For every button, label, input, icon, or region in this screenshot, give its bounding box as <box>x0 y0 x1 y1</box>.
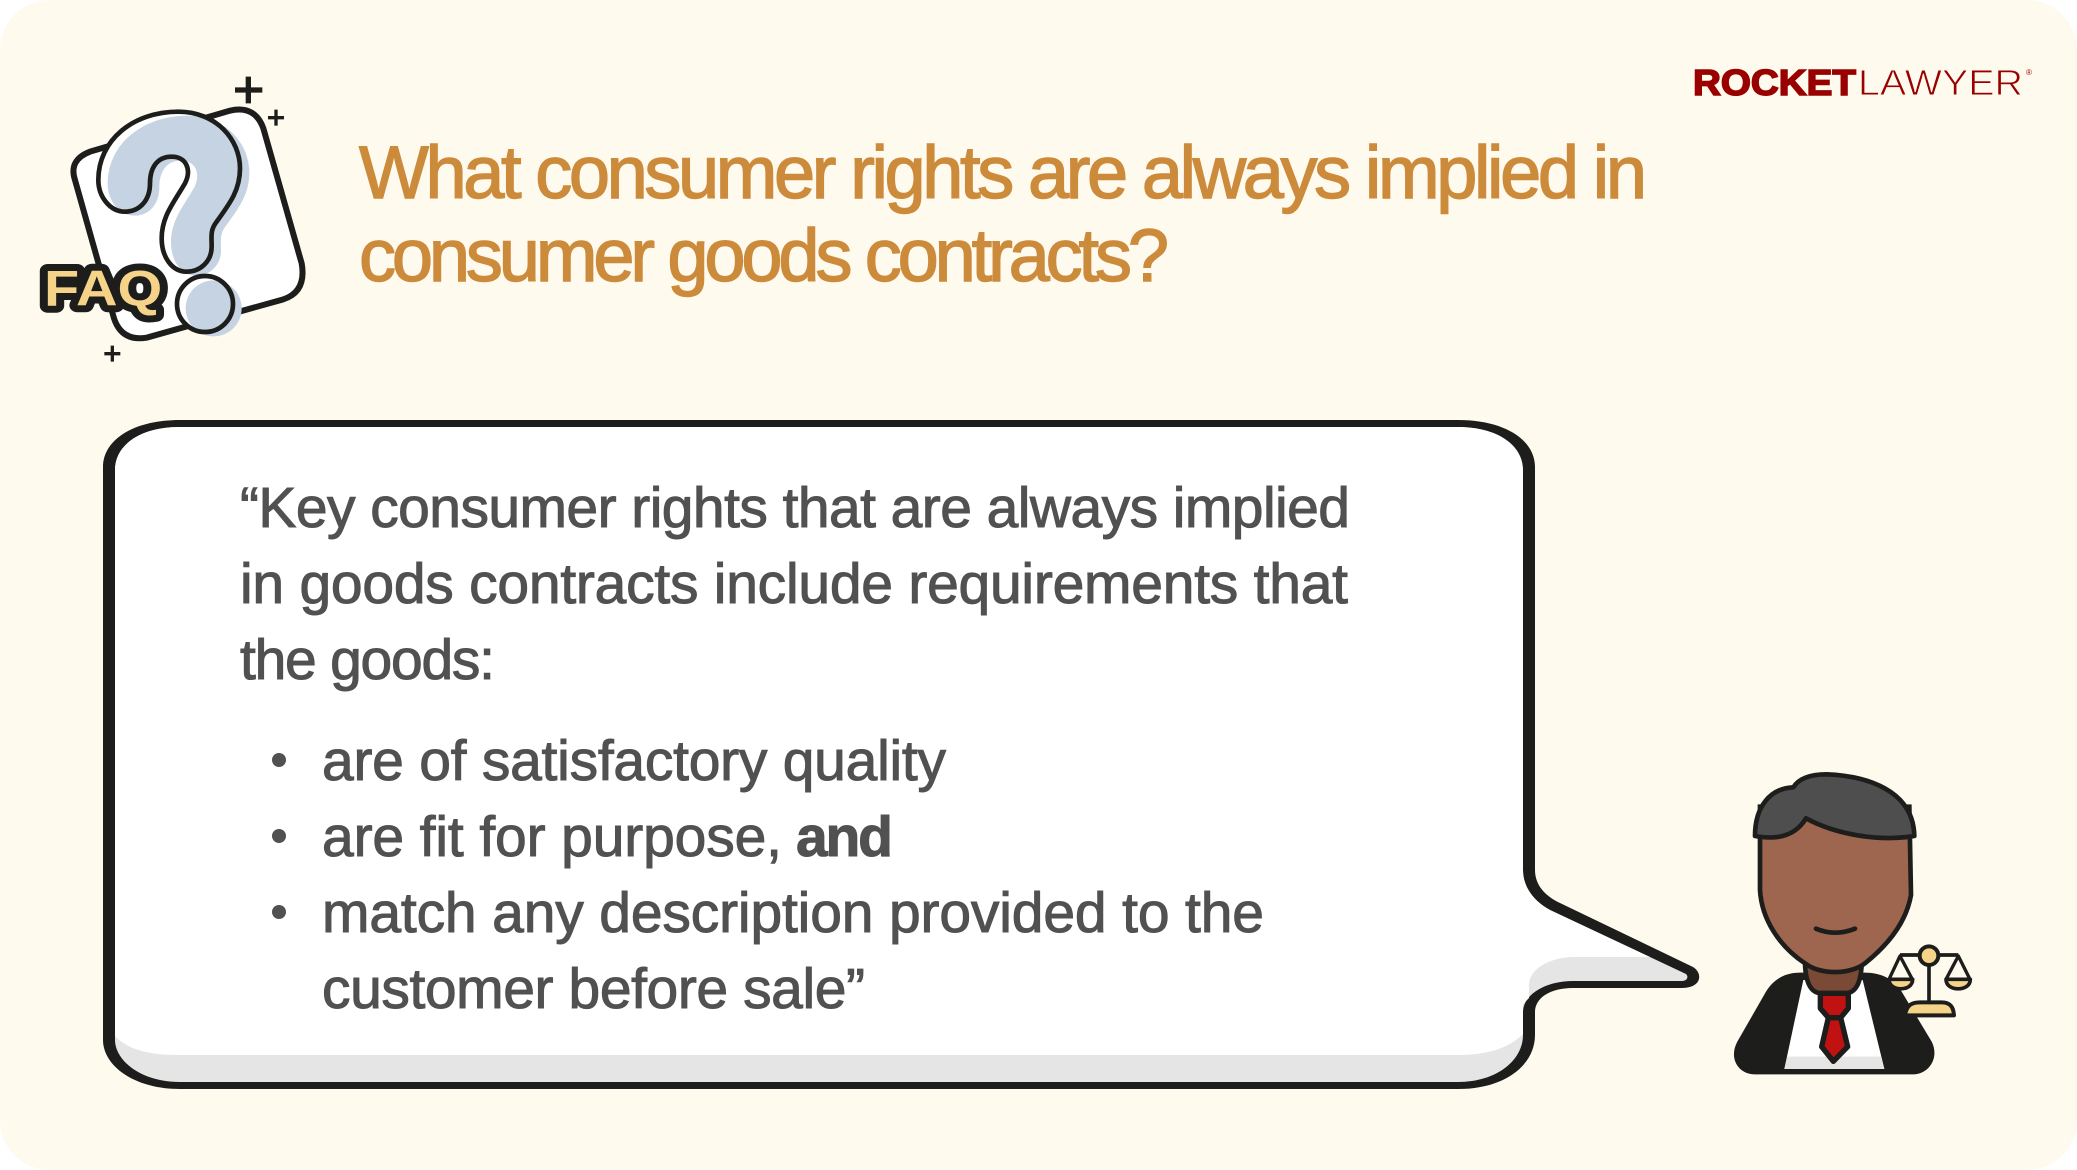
bullet list: customer before sale” <box>322 957 865 1021</box>
bullet list <box>272 729 1264 1021</box>
title: What consumer rights are always implied in <box>359 131 1647 214</box>
logo: Rocket Lawyer: LAWYER <box>1858 62 2023 103</box>
lawyer neck <box>1805 962 1862 993</box>
icon: question mark dot <box>177 276 242 336</box>
FAQ label: FAQ <box>44 261 162 317</box>
lawyer suit <box>1734 973 1934 1074</box>
lawyer smile <box>1816 929 1855 933</box>
icon: scales of justice <box>1889 946 1970 1015</box>
bullet list: are fit for purpose, <box>322 805 782 869</box>
lawyer hair <box>1755 774 1914 838</box>
lawyer face <box>1760 807 1911 972</box>
icon: lawyer with scales <box>1734 774 1970 1074</box>
quote text block: the goods: <box>240 628 495 692</box>
logo: Rocket Lawyer <box>1693 62 2032 103</box>
speech bubble <box>103 420 1699 1089</box>
title: consumer goods contracts? <box>359 214 1169 297</box>
bullet list: and <box>796 805 893 869</box>
icon: question mark hook <box>98 112 249 276</box>
icon: tilted card <box>73 110 303 338</box>
icon: FAQ question mark <box>44 77 303 362</box>
title <box>359 131 1647 297</box>
lawyer tie <box>1820 993 1848 1061</box>
bullet list: match any description provided to the <box>322 881 1264 945</box>
logo: Rocket Lawyer: ROCKET <box>1693 62 1856 103</box>
quote text block: “Key consumer rights that are always implied <box>240 476 1350 540</box>
logo: Rocket Lawyer: ® <box>2026 68 2032 77</box>
quote text block: in goods contracts include requirements that <box>240 552 1348 616</box>
lawyer shirt <box>1784 980 1884 1069</box>
bullet list: are of satisfactory quality <box>322 729 946 793</box>
quote text block <box>240 476 1350 692</box>
sparkle plus marks <box>104 77 284 362</box>
